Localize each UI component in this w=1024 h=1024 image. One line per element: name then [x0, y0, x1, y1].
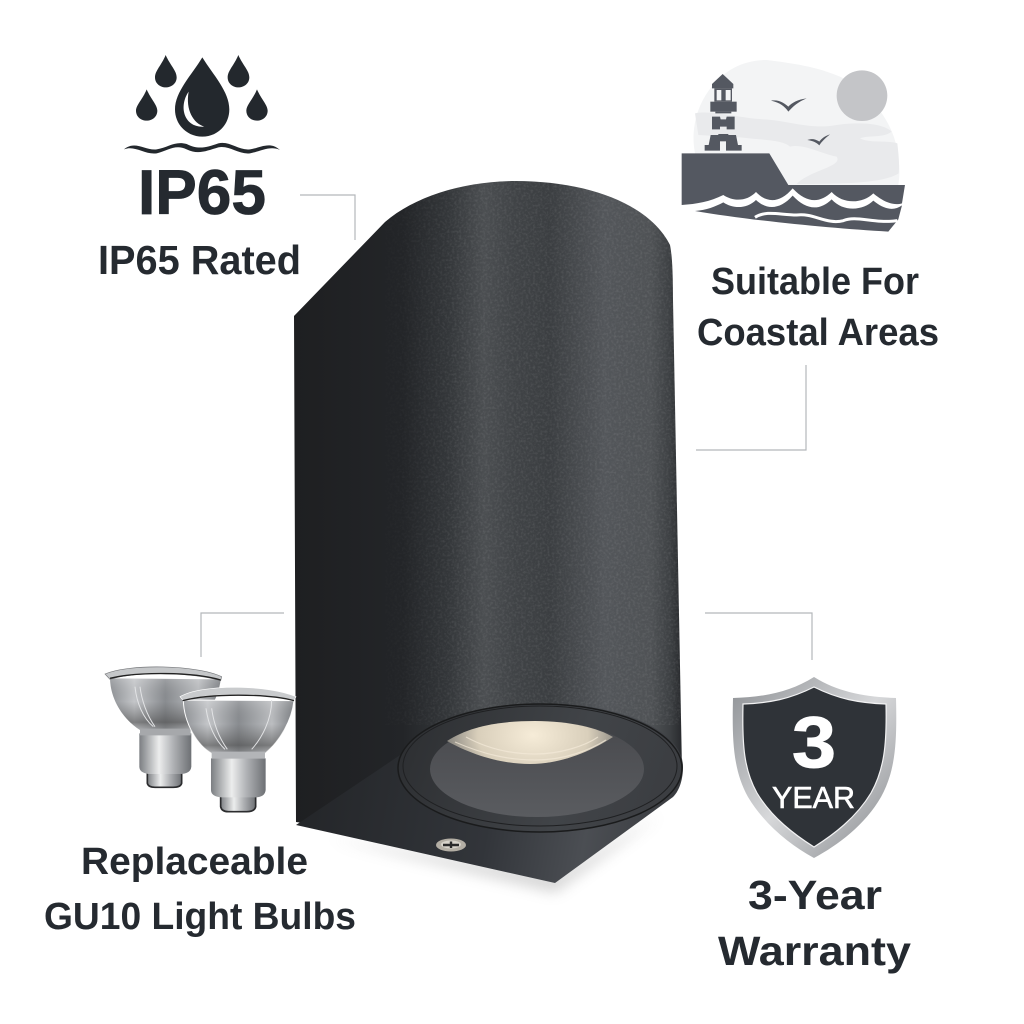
birds — [771, 98, 830, 145]
IP65 heading: IP65 — [138, 158, 266, 228]
shield word: YEAR — [772, 780, 855, 815]
leader line: warranty — [705, 613, 812, 660]
label: IP65 Rated: IP65 Rated — [98, 237, 301, 283]
label: Suitable For Coastal Areas: Suitable For — [711, 261, 919, 303]
shield face — [743, 687, 886, 847]
glowing bulb — [447, 721, 613, 764]
label: Suitable For Coastal Areas: Coastal Areas — [697, 312, 939, 354]
wall light product — [294, 181, 683, 892]
lamp texture — [385, 181, 682, 725]
leader line: bulbs — [201, 613, 284, 657]
clouds — [695, 113, 899, 184]
shield border — [733, 677, 896, 858]
icon: GU10 bulbs — [105, 667, 296, 812]
label: Suitable For Coastal Areas — [697, 261, 939, 354]
label: 3-Year Warranty: 3-Year — [748, 872, 882, 918]
sun — [837, 70, 887, 121]
lower sea — [695, 196, 902, 232]
label: Replaceable GU10 Light Bulbs: Replaceable — [81, 841, 308, 883]
leader line: IP65 — [300, 195, 355, 240]
inner ring line — [403, 706, 677, 826]
label: 3-Year Warranty — [718, 872, 911, 974]
screw — [436, 838, 466, 852]
label: 3-Year Warranty: Warranty — [718, 928, 911, 974]
leader line: coastal — [696, 365, 806, 450]
pier and upper sea — [682, 153, 905, 205]
ground shadow — [330, 815, 660, 892]
lens recess — [430, 721, 644, 817]
front bulb — [180, 687, 296, 812]
icon: warranty shield — [733, 677, 896, 858]
lens ring — [398, 704, 682, 832]
icon: water drops — [124, 55, 280, 154]
bottom plate — [296, 704, 683, 883]
wave highlight — [755, 213, 897, 222]
label: Replaceable GU10 Light Bulbs — [44, 841, 356, 938]
icon: coastal lighthouse scene — [682, 60, 905, 232]
rear bulb — [105, 667, 222, 787]
shield number: 3 — [792, 703, 836, 783]
label: Replaceable GU10 Light Bulbs: GU10 Light Bulbs — [44, 896, 356, 938]
lamp body — [294, 181, 682, 860]
lighthouse — [705, 74, 742, 151]
sky blob — [694, 60, 899, 185]
